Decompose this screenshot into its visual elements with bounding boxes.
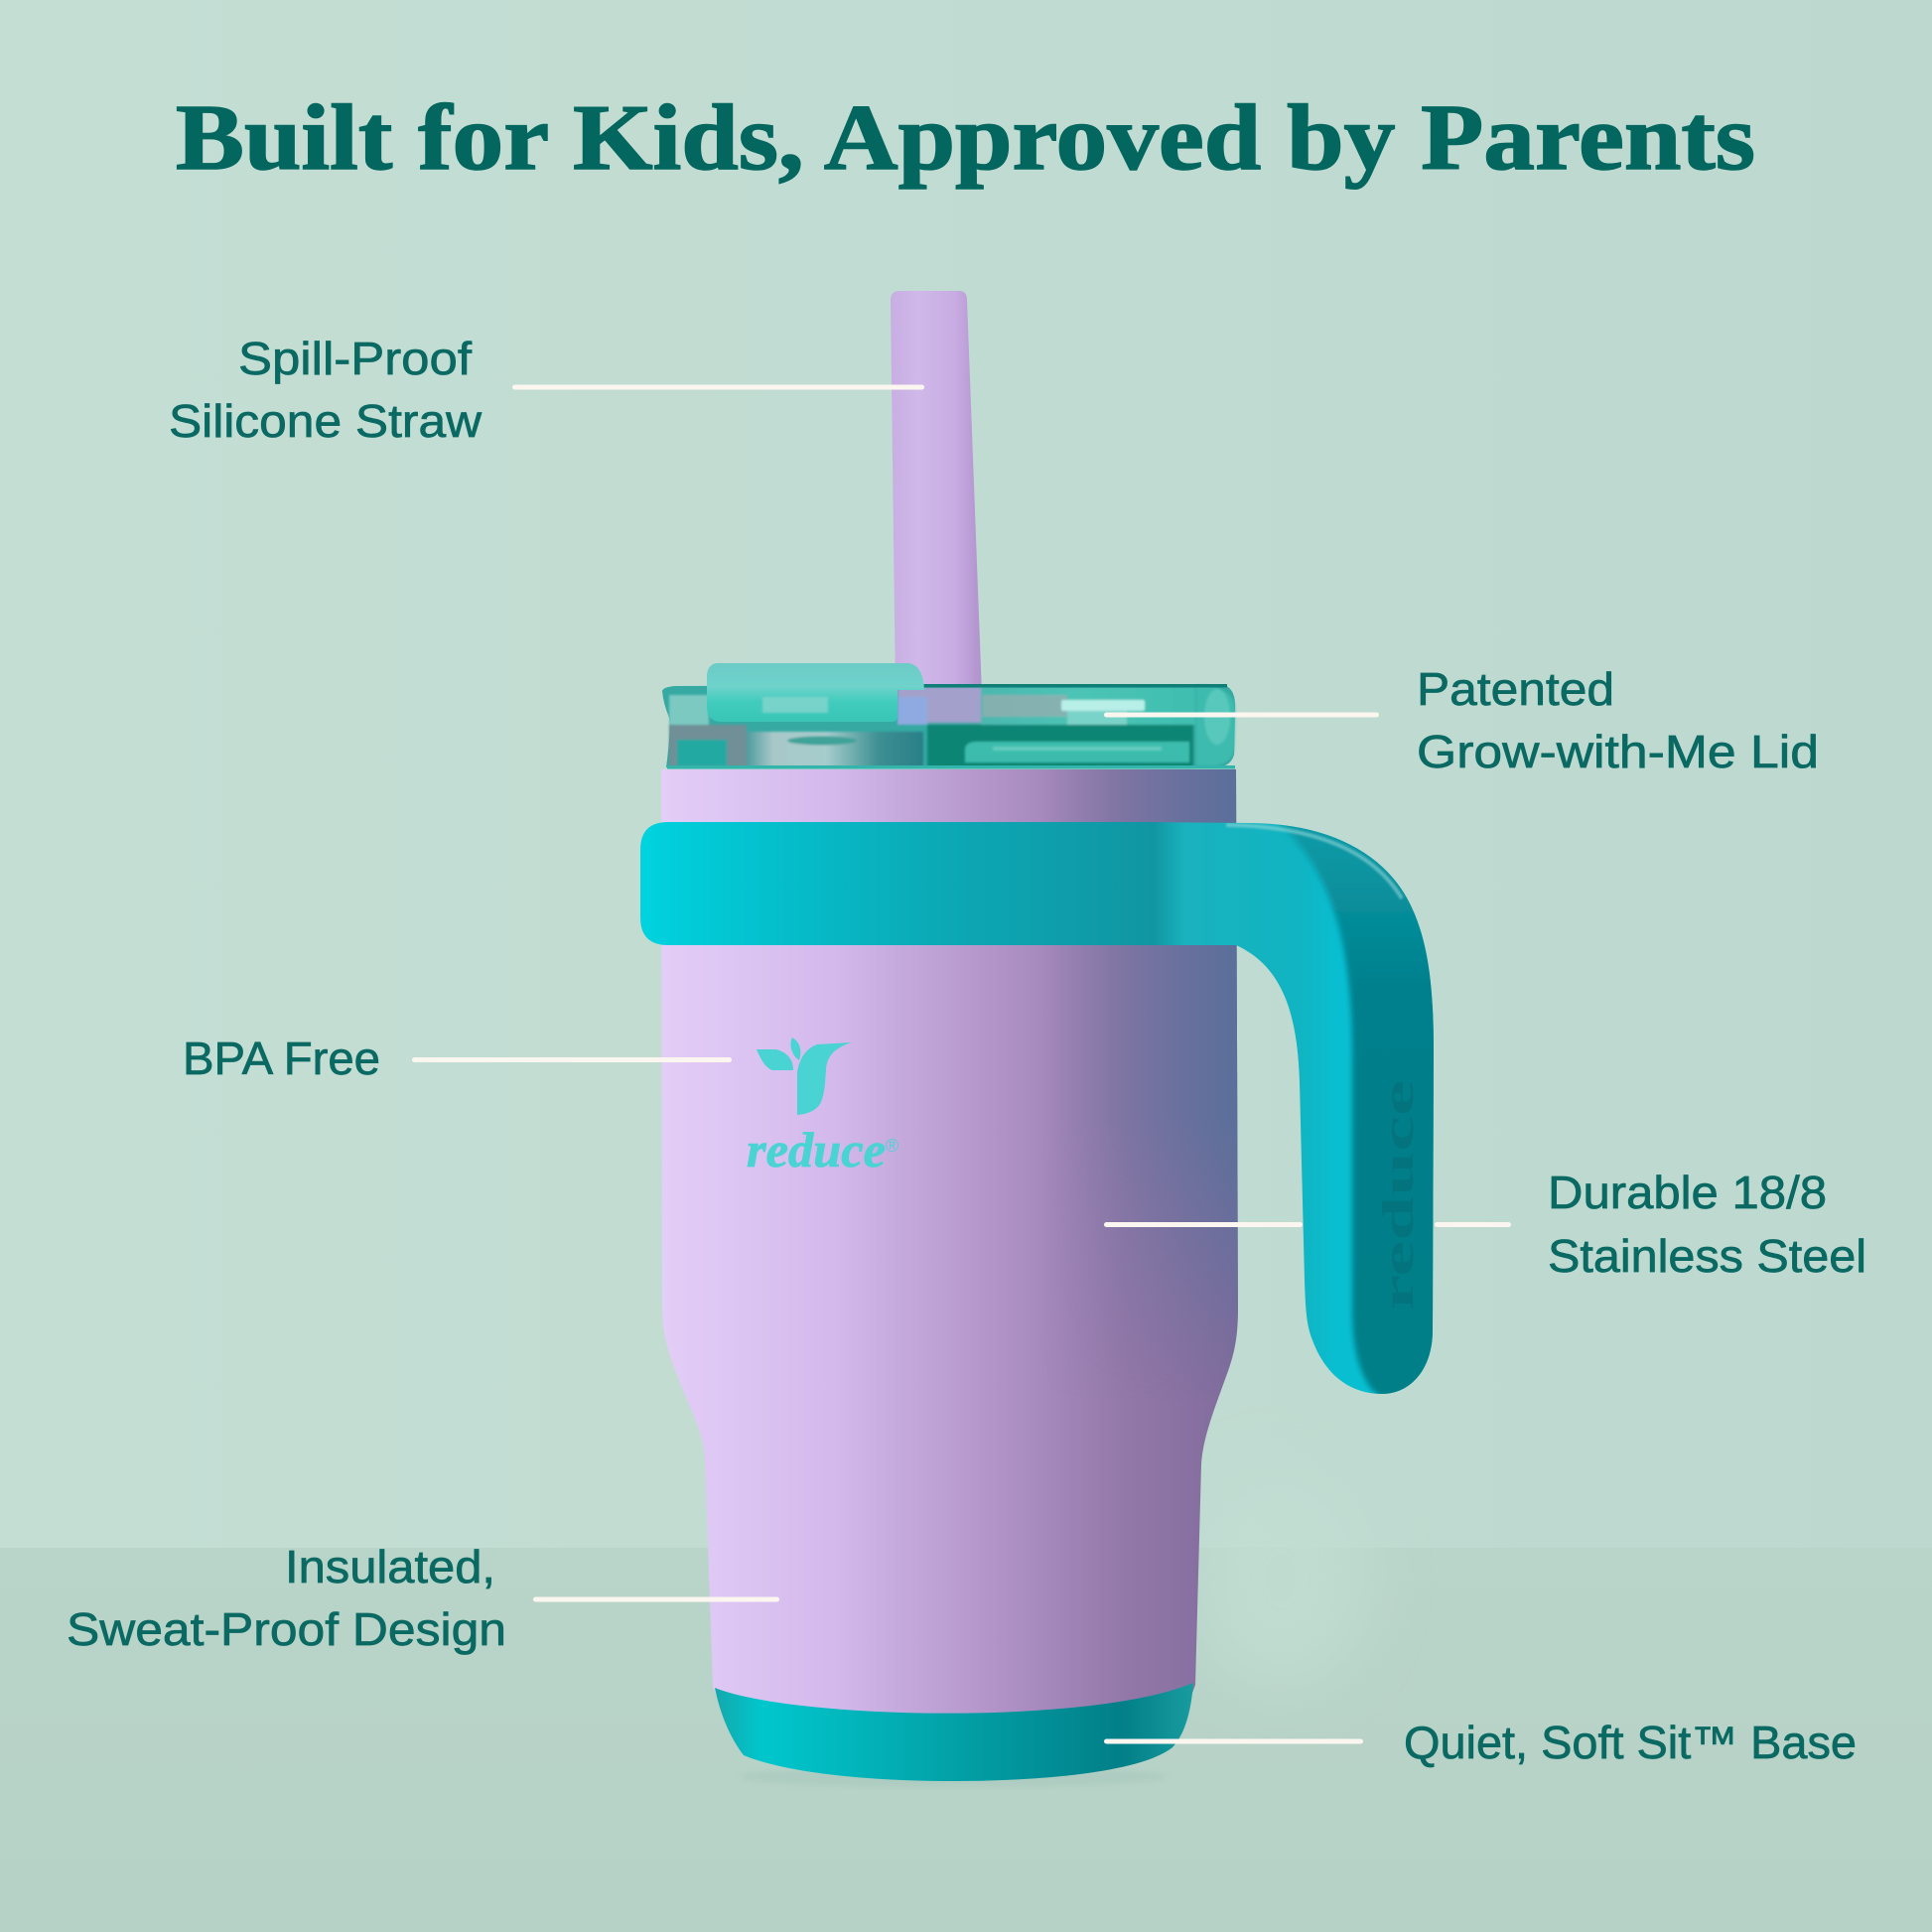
embossed handle wordmark: reduce xyxy=(1374,1080,1423,1311)
callout: BPA free: BPA Free xyxy=(183,1033,380,1084)
straw xyxy=(891,291,982,695)
title: Built for Kids, Approved by Parents xyxy=(176,86,1755,190)
callout: stainless steel: Stainless Steel xyxy=(1548,1230,1866,1282)
carry band xyxy=(640,822,1152,945)
callout: insulated xyxy=(67,1541,779,1655)
logo wordmark: reduce xyxy=(747,1122,886,1177)
handle xyxy=(1142,819,1449,1400)
callout: lid: Patented xyxy=(1417,663,1614,715)
logo leaves and stem xyxy=(757,1037,852,1115)
callout: BPA free xyxy=(183,1033,732,1084)
callout: stainless steel xyxy=(1104,1167,1866,1282)
callout: insulated: Insulated, xyxy=(285,1541,495,1592)
callout: straw xyxy=(169,333,924,447)
lid xyxy=(662,663,1235,768)
callout: base: Quiet, Soft Sit™ Base xyxy=(1404,1717,1857,1768)
callout: stainless steel: Durable 18/8 xyxy=(1548,1167,1827,1218)
callout: base xyxy=(1104,1717,1857,1768)
callout: insulated: Sweat-Proof Design xyxy=(67,1603,506,1655)
background floor xyxy=(0,1548,1932,1932)
callout: straw: Silicone Straw xyxy=(169,395,483,447)
cup body xyxy=(661,764,1241,1723)
reduce logo xyxy=(747,1037,898,1177)
callout: straw: Spill-Proof xyxy=(238,333,472,384)
callout: lid: Grow-with-Me Lid xyxy=(1417,726,1819,777)
logo registered mark: ® xyxy=(886,1136,898,1156)
base xyxy=(715,1683,1193,1781)
tumbler illustration xyxy=(640,291,1449,1781)
contact shadow under the cup xyxy=(740,1767,1167,1787)
soft reflection beside the cup xyxy=(1191,1469,1370,1688)
callout: lid xyxy=(1104,663,1819,777)
sliding spout cover xyxy=(707,663,924,722)
